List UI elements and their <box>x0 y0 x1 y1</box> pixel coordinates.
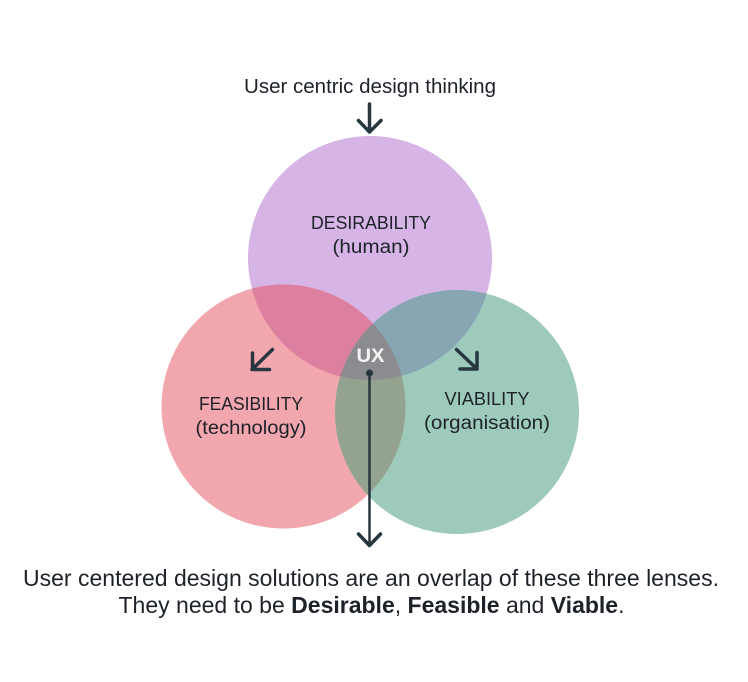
label: UX: UX <box>356 346 385 367</box>
arrow: towards feasibility <box>252 350 272 370</box>
circle: viability <box>335 290 579 534</box>
arrow: UX down to conclusion <box>358 370 380 546</box>
overlap: centre <box>340 324 402 380</box>
arrow: towards viability <box>456 350 477 369</box>
label: desirability <box>311 213 431 258</box>
conclusion text <box>23 565 719 618</box>
label: viability: VIABILITY <box>444 389 530 409</box>
label: viability: (organisation) <box>424 413 550 434</box>
label: desirability: (human) <box>332 237 410 258</box>
venn diagram <box>162 136 579 534</box>
conclusion text: User centered design solutions are an overlap of these three lenses. <box>23 565 719 591</box>
arrow: down into desirability <box>358 104 381 132</box>
infographic <box>24 78 717 618</box>
label: desirability: DESIRABILITY <box>311 213 431 233</box>
label: viability <box>424 389 550 434</box>
circle: feasibility <box>162 284 406 528</box>
overlap: desirability and viability <box>340 290 487 376</box>
overlap: feasibility and viability <box>335 324 406 495</box>
label: feasibility: (technology) <box>196 418 306 439</box>
conclusion text: They need to be Desirable, Feasible and Viable. <box>118 592 624 618</box>
overlap: desirability and feasibility <box>252 284 373 376</box>
label: feasibility: FEASIBILITY <box>199 394 303 414</box>
circle: desirability <box>248 136 492 380</box>
label: feasibility <box>196 394 306 439</box>
title: User centric design thinking <box>244 76 496 98</box>
